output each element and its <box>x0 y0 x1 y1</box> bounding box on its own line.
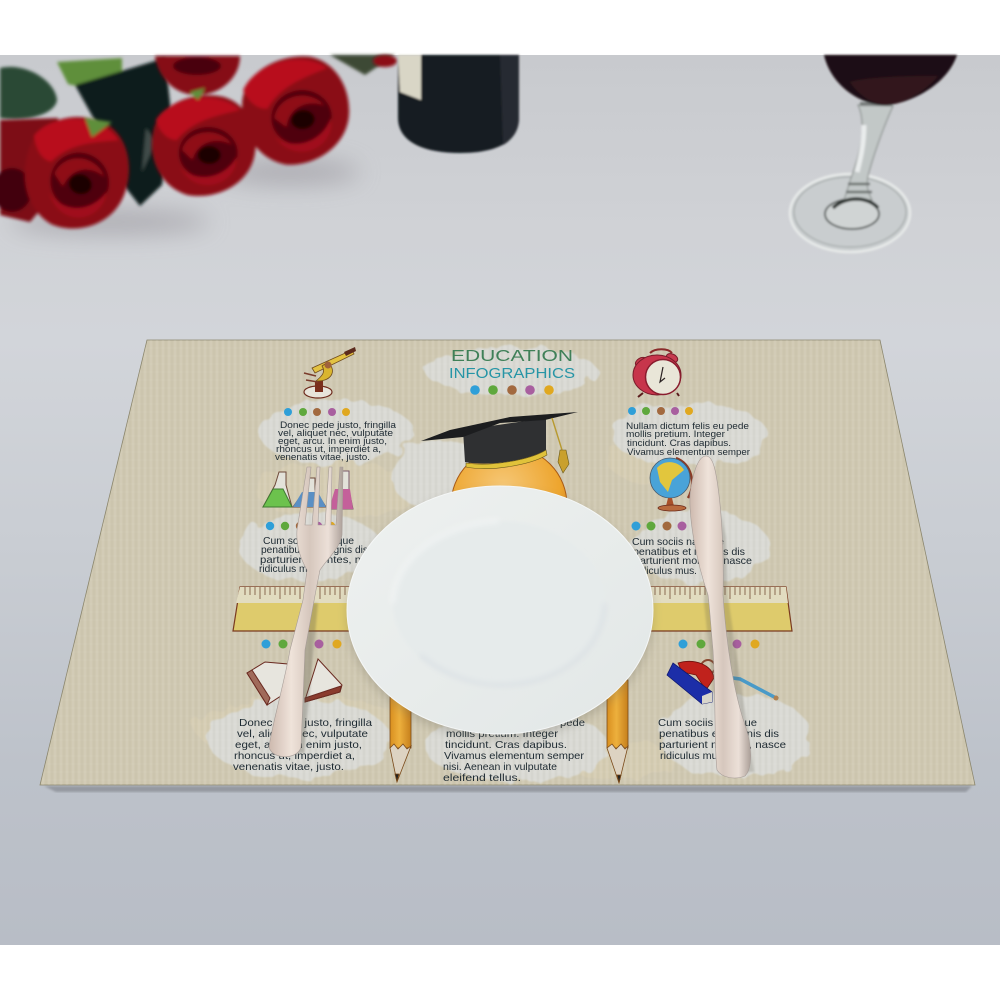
text block: bottom left: rhoncus ut, imperdiet a, <box>234 751 355 762</box>
text block: top left: eget, arcu. In enim justo, <box>278 436 387 446</box>
roses <box>0 50 397 238</box>
text block: top right: mollis pretium. Integer <box>626 429 725 439</box>
text block: top right <box>626 421 750 457</box>
dots: clock block <box>628 407 693 415</box>
icon: globe <box>650 458 692 511</box>
text block: bottom left <box>233 718 372 773</box>
glass stem <box>844 105 893 200</box>
dots: book block <box>262 640 342 648</box>
fork <box>269 467 343 757</box>
text block: top left: vel, aliquet nec, vulputate <box>278 428 393 438</box>
wine glass <box>790 55 957 252</box>
text block: middle right: parturient montes, nasce <box>634 556 752 567</box>
text block: middle left <box>259 536 385 575</box>
orange head <box>451 447 567 563</box>
text block: bottom center: mollis pretium. Integer <box>446 729 559 740</box>
title <box>449 348 575 382</box>
dots: microscope block <box>284 408 350 416</box>
bottle body <box>398 55 519 153</box>
graduate figure <box>421 412 578 563</box>
text block: top right: tincidunt. Cras dapibus. <box>627 438 731 448</box>
icon: open books <box>247 659 342 705</box>
mortarboard <box>421 412 578 441</box>
icon: microscope <box>304 347 356 398</box>
dots: globe block <box>632 522 702 530</box>
text block: bottom right: ridiculus mus. <box>660 751 726 762</box>
ruler: left <box>233 587 352 631</box>
mat weave texture <box>40 340 975 785</box>
text block: bottom center: eleifend tellus. <box>443 773 521 784</box>
plate rim <box>347 486 653 734</box>
rose bouquet <box>0 50 397 238</box>
plate well <box>393 521 605 685</box>
placemat <box>40 340 975 785</box>
paint blobs behind text <box>206 347 811 782</box>
dots: flask block <box>266 522 335 530</box>
icon: magnet and magnifier <box>667 660 778 704</box>
bottom white band <box>0 945 1000 1000</box>
wine bowl <box>824 55 957 105</box>
text block: bottom right <box>658 718 786 762</box>
text block: bottom right: parturient montes, nasce <box>659 740 786 751</box>
title line 2: INFOGRAPHICS <box>449 366 575 382</box>
text block: bottom center: Nullam dictum felis eu pede <box>447 718 585 729</box>
text block: bottom right: penatibus et magnis dis <box>659 729 779 740</box>
text block: top left: venenatis vitae, justo. <box>275 452 370 462</box>
title line 1: EDUCATION <box>451 348 573 365</box>
text block: top right: Nullam dictum felis eu pede <box>626 421 749 431</box>
text block: middle right: penatibus et magnis dis <box>633 547 745 558</box>
title dots <box>470 385 554 395</box>
icon: left pencil <box>390 690 411 782</box>
wine bottle <box>398 55 519 153</box>
glass base <box>790 174 910 252</box>
text block: middle left: ridiculus mus. <box>259 564 321 575</box>
icon: right pencil <box>607 680 628 783</box>
text block: middle left: Cum sociis natoque <box>263 536 354 547</box>
fork body <box>269 467 343 757</box>
text block: bottom left: venenatis vitae, justo. <box>233 762 344 773</box>
rose shadow <box>10 160 360 234</box>
plate shadow <box>347 491 653 739</box>
mat surface <box>40 340 975 785</box>
bottle label <box>398 55 421 100</box>
mat shadow <box>44 786 972 792</box>
dots: magnet block <box>678 640 760 648</box>
tassel <box>552 418 562 450</box>
text block: bottom left: vel, aliquet nec, vulputate <box>237 729 368 740</box>
text block: bottom center <box>443 718 585 784</box>
text block: top left <box>275 420 396 462</box>
beige stains <box>195 436 692 780</box>
icon: alarm clock <box>633 349 681 397</box>
text block: bottom center: tincidunt. Cras dapibus. <box>445 740 567 751</box>
text block: top left: Donec pede justo, fringilla <box>280 420 396 430</box>
leaves <box>0 55 395 206</box>
text block: middle right: ridiculus mus. <box>635 566 697 577</box>
text block: middle right: Cum sociis natoque <box>632 537 724 548</box>
knife <box>690 456 754 778</box>
text block: bottom center: nisi. Aenean in vulputate <box>443 762 557 773</box>
icon: flasks <box>263 471 353 509</box>
knife blade and handle <box>690 456 751 778</box>
text block: bottom left: Donec pede justo, fringilla <box>239 718 372 729</box>
text block: bottom center: Vivamus elementum semper <box>444 751 585 762</box>
text block: middle left: penatibus et magnis dis <box>261 545 368 556</box>
ruler: right <box>650 587 792 631</box>
cap body <box>463 418 546 464</box>
text block: middle left: parturient montes, nasce <box>260 555 385 566</box>
text block: bottom right: Cum sociis natoque <box>658 718 757 729</box>
plate <box>347 486 653 739</box>
text block: bottom left: eget, arcu. In enim justo, <box>235 740 362 751</box>
text block: top left: rhoncus ut, imperdiet a, <box>276 444 381 454</box>
text block: middle right <box>632 537 752 577</box>
fork shadow <box>276 603 318 753</box>
knife shadow <box>704 462 754 772</box>
text block: top right: Vivamus elementum semper <box>627 447 750 457</box>
